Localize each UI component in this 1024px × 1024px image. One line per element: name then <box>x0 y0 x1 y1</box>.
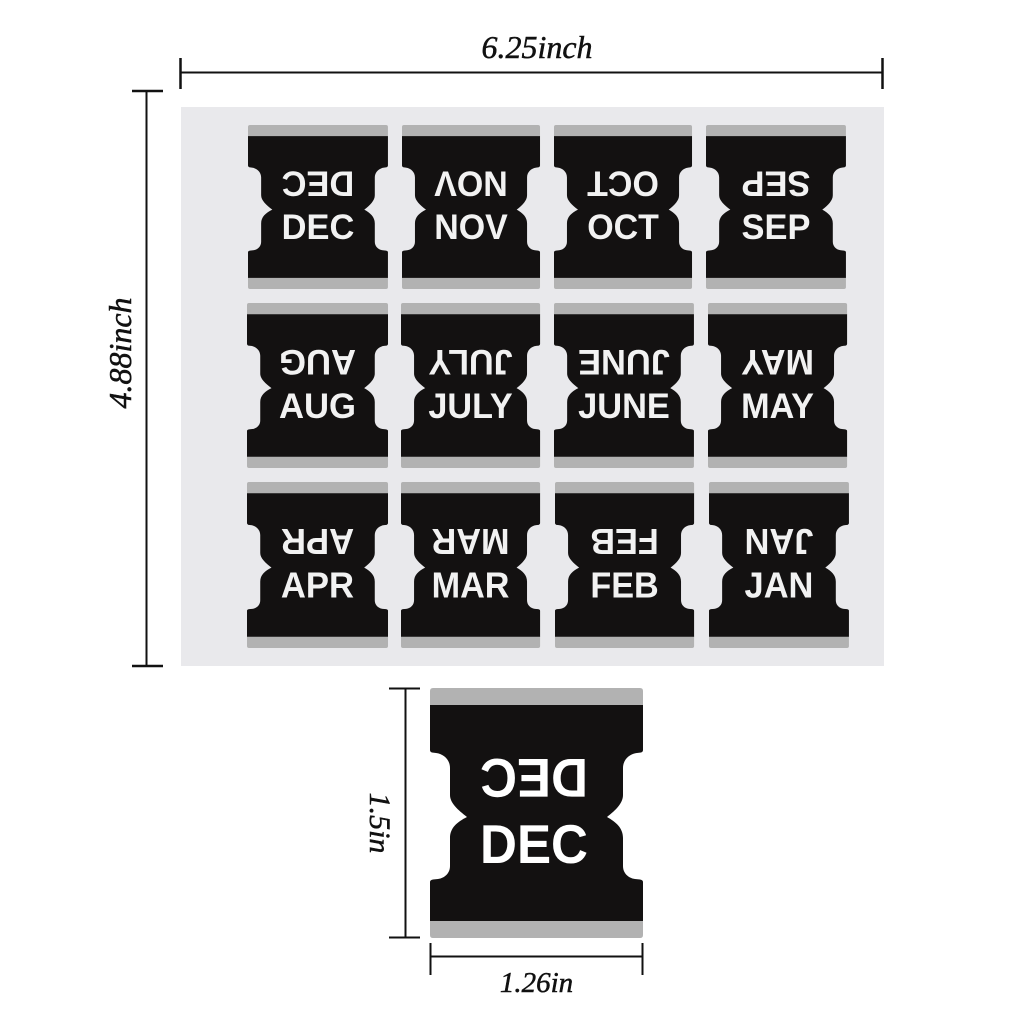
label: FEB: FEB <box>590 521 659 561</box>
enlarged label: DEC: DEC <box>480 747 588 808</box>
label: MAY: MAY <box>741 386 814 426</box>
label: JUNE <box>554 303 694 468</box>
label: DEC <box>248 125 388 289</box>
label: MAR: MAR <box>432 566 509 606</box>
label: OCT: OCT <box>587 209 659 247</box>
label: MAY <box>708 303 847 468</box>
label: OCT: OCT <box>587 163 659 202</box>
label: JAN: JAN <box>745 566 813 606</box>
label: AUG: AUG <box>279 342 356 381</box>
height dimension line: 4.88inch <box>132 91 163 666</box>
height dimension line: 1.5in <box>389 688 420 938</box>
enlarged label: DEC <box>430 688 643 938</box>
label: JUNE: JUNE <box>578 342 670 381</box>
sticker sheet panel <box>181 107 884 666</box>
label: APR: APR <box>281 521 354 561</box>
label: DEC: DEC <box>282 163 354 203</box>
label: OCT <box>554 125 692 289</box>
width dimension line: 1.26in <box>430 943 643 975</box>
label: JULY <box>401 303 540 468</box>
label: FEB: FEB <box>590 566 659 606</box>
label: FEB <box>555 482 694 648</box>
label: SEP <box>706 125 846 289</box>
label: DEC: DEC <box>282 208 354 247</box>
label: MAY: MAY <box>741 342 814 381</box>
label: NOV <box>402 125 540 289</box>
label: MAR: MAR <box>432 521 509 561</box>
label: SEP: SEP <box>742 208 810 247</box>
width dimension line: 6.25inch <box>180 58 882 89</box>
height label: 1.5in: 1.5in <box>363 793 396 853</box>
label: APR <box>247 482 388 648</box>
label: JULY: JULY <box>428 342 513 381</box>
label: JULY: JULY <box>428 386 513 426</box>
label: JAN <box>709 482 849 648</box>
enlarged label: DEC: DEC <box>480 814 588 875</box>
label: AUG: AUG <box>279 386 356 426</box>
width label: 1.26in: 1.26in <box>500 967 573 999</box>
label: SEP: SEP <box>742 163 810 203</box>
label: JAN: JAN <box>745 521 813 561</box>
label: AUG <box>247 303 388 468</box>
label: MAR <box>401 482 540 648</box>
label: APR: APR <box>281 566 354 606</box>
label: NOV: NOV <box>434 163 508 202</box>
width label: 6.25inch <box>481 29 593 65</box>
height label: 4.88inch <box>102 297 138 409</box>
label: NOV: NOV <box>434 209 508 247</box>
label: JUNE: JUNE <box>578 386 670 426</box>
